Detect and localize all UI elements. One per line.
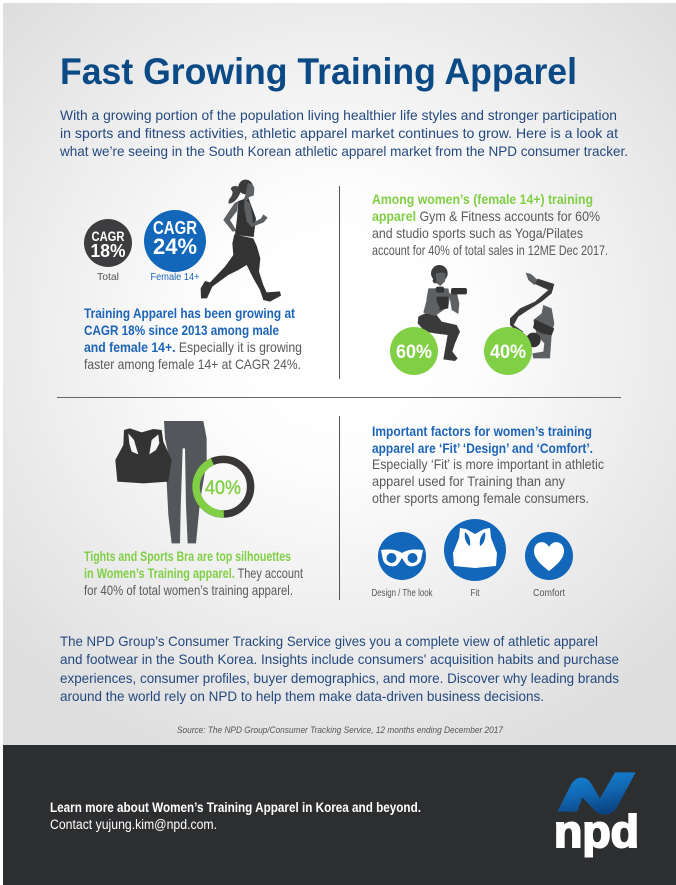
text: important factors: other sports among female consumers. (372, 491, 589, 506)
panel: CAGR growth (84, 180, 302, 372)
text: top silhouettes (84, 549, 303, 598)
CAGR 18% badge: Total (97, 271, 119, 283)
footer band (3, 745, 676, 885)
text: gym and fitness share (372, 192, 608, 258)
icon: sports bra (115, 428, 172, 483)
icon: squatting woman with dumbbell (418, 265, 467, 361)
source note: Source: The NPD Group/Consumer Tracking Service, 12 months ending December 2017 (177, 725, 504, 735)
text: gym and fitness share: apparel Gym & Fitness accounts for 60% (372, 209, 600, 224)
40% badge (484, 327, 532, 375)
title: Fast Growing Training Apparel (60, 51, 577, 92)
text: training apparel growth: Training Apparel has been growing at (84, 306, 295, 321)
text: training apparel growth: and female 14+. Especially it is growing (84, 340, 302, 355)
panel: important factors (372, 424, 604, 599)
icon: female runner (201, 180, 281, 302)
NPD logo: npd (554, 806, 639, 857)
donut chart: 40%: 40% (205, 477, 241, 499)
text: training apparel growth: CAGR 18% since 2013 among male (84, 323, 279, 338)
CAGR 18% badge: CAGR (92, 229, 125, 244)
NPD logo (554, 772, 639, 857)
intro paragraph: With a growing portion of the population living healthier life styles and stronger participation (60, 108, 617, 123)
closing paragraph: The NPD Group’s Consumer Tracking Service gives you a complete view of athletic apparel (60, 634, 598, 649)
icon: glasses, design: Design / The look (372, 587, 433, 599)
text: important factors: apparel are ‘Fit’ ‘Design’ and ‘Comfort’. (372, 441, 593, 456)
icon: glasses, design (372, 532, 433, 599)
icon: heart, comfort: Comfort (533, 587, 565, 599)
text: important factors: Especially ‘Fit’ is more important in athletic (372, 457, 604, 472)
text: important factors (372, 424, 604, 506)
CAGR 18% badge (84, 219, 132, 283)
text: top silhouettes: in Women’s Training apparel. They account (84, 566, 303, 581)
CAGR 24% badge: 24% (153, 234, 197, 259)
footer contact text: Learn more about Women’s Training Apparel in Korea and beyond. (50, 800, 421, 815)
CAGR 24% badge (144, 210, 206, 283)
donut chart: 40% (196, 459, 251, 514)
40% badge: 40% (490, 342, 526, 363)
intro paragraph (59, 108, 628, 159)
60% badge: 60% (396, 342, 432, 363)
60% badge (390, 327, 438, 375)
closing paragraph (60, 634, 619, 704)
CAGR 24% badge: Female 14+ (150, 271, 200, 283)
panel: gym and studio share (372, 192, 608, 375)
intro paragraph: in sports and fitness activities, athletic apparel market continues to grow. Here is a look at (60, 126, 618, 141)
footer contact text (50, 800, 421, 832)
CAGR 18% badge: 18% (90, 241, 126, 261)
text: gym and fitness share: account for 40% of total sales in 12ME Dec 2017. (372, 243, 608, 258)
text: top silhouettes: for 40% of total women’s training apparel. (84, 583, 293, 598)
footer contact text: Contact yujung.kim@npd.com. (50, 817, 217, 832)
icon: yoga pose woman (510, 273, 554, 358)
closing paragraph: around the world rely on NPD to help them make data-driven business decisions. (60, 689, 544, 704)
text: important factors: Important factors for women’s training (372, 424, 592, 439)
text: training apparel growth: faster among female 14+ at CAGR 24%. (84, 357, 301, 372)
text: gym and fitness share: and studio sports such as Yoga/Pilates (372, 226, 583, 241)
closing paragraph: and footwear in the South Korea. Insights include consumers' acquisition habits and purchase (60, 652, 619, 667)
panel: top silhouettes (84, 421, 303, 598)
text: gym and fitness share: Among women’s (female 14+) training (372, 192, 593, 207)
icon: tights (164, 421, 207, 543)
intro paragraph: what we’re seeing in the South Korean athletic apparel market from the NPD consumer tracker. (59, 144, 628, 159)
CAGR 24% badge: CAGR (153, 218, 197, 238)
text: top silhouettes: Tights and Sports Bra are top silhouettes (84, 549, 291, 564)
text: training apparel growth (84, 306, 302, 372)
icon: sports bra, fit: Fit (470, 587, 480, 599)
icon: sports bra, fit (444, 519, 506, 599)
closing paragraph: experiences, consumer profiles, buyer demographics, and more. Discover why leading brands (60, 671, 619, 686)
text: important factors: apparel used for Training than any (372, 474, 565, 489)
icon: heart, comfort (525, 532, 573, 599)
